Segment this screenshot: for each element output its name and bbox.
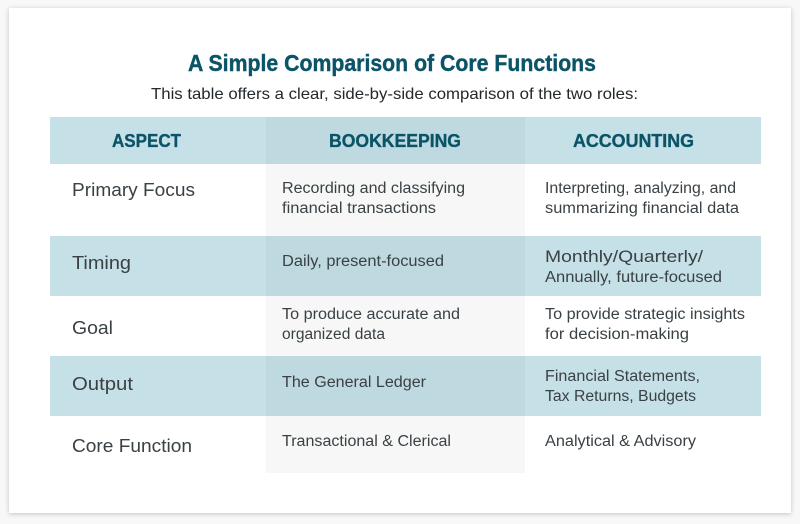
row: output: Output (72, 373, 133, 394)
row: goal: To produce accurate and (282, 306, 460, 323)
title: A Simple Comparison of Core Functions (188, 50, 596, 76)
row: primary focus: Interpreting, analyzing, and (545, 180, 736, 197)
row: output: Tax Returns, Budgets (545, 388, 696, 405)
row: goal: To provide strategic insights (545, 306, 745, 323)
row: output (50, 356, 761, 416)
row: timing: Annually, future-focused (545, 269, 722, 286)
row: timing: Monthly/Quarterly/ (545, 247, 703, 266)
table header row: ASPECT (112, 131, 181, 151)
table header row: BOOKKEEPING (329, 131, 461, 151)
row: output: Financial Statements, (545, 368, 700, 385)
row: output: The General Ledger (282, 374, 426, 391)
row: primary focus: financial transactions (282, 200, 436, 217)
row: primary focus: Recording and classifying (282, 180, 465, 197)
row: primary focus: summarizing financial data (545, 200, 739, 217)
row: timing (50, 236, 761, 296)
row: primary focus: Primary Focus (72, 179, 195, 200)
row: goal (72, 306, 745, 343)
row: core function: Core Function (72, 435, 192, 456)
table header row: ACCOUNTING (573, 131, 694, 151)
row: goal: Goal (72, 317, 113, 338)
panel: comparison table (50, 117, 761, 473)
row: timing: Daily, present-focused (282, 253, 444, 270)
row: timing: Timing (72, 252, 131, 273)
row: primary focus (72, 179, 739, 217)
subtitle: This table offers a clear, side-by-side comparison of the two roles: (151, 86, 638, 103)
row: core function: Transactional & Clerical (282, 433, 451, 450)
row: core function: Analytical & Advisory (545, 433, 696, 450)
table header row (50, 117, 761, 164)
bookkeeping column background (266, 164, 525, 473)
row: core function (72, 433, 696, 456)
row: goal: organized data (282, 326, 385, 343)
row: goal: for decision-making (545, 326, 689, 343)
